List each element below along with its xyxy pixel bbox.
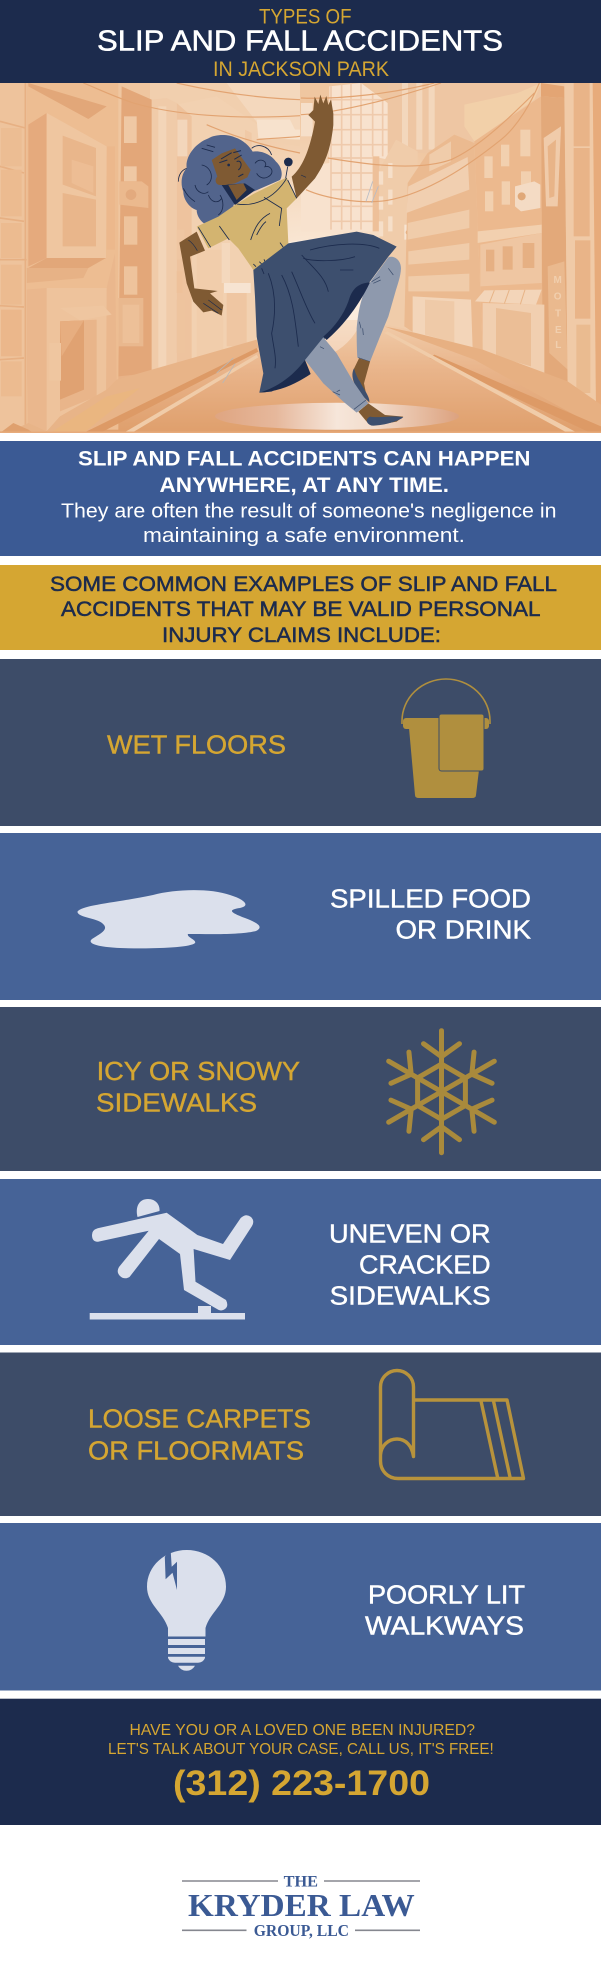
balcony building	[404, 135, 483, 350]
heading line: location: IN JACKSON PARK	[213, 58, 389, 81]
arm detail lines	[188, 175, 306, 313]
icon: falling person	[90, 1199, 253, 1320]
motel sign: T	[555, 308, 561, 319]
label: poorly lit line 1: POORLY LIT	[368, 1581, 525, 1609]
skirt shadow lower	[259, 360, 311, 393]
far left column of windows	[0, 290, 26, 432]
intro heading: SLIP AND FALL ACCIDENTS CAN HAPPEN	[78, 448, 530, 471]
glass tower	[301, 83, 388, 231]
motion lines, right	[366, 181, 378, 203]
hair curl lines	[178, 145, 272, 215]
panel: loose carpets or floormats	[0, 1352, 601, 1516]
panel: icy or snowy sidewalks	[0, 1007, 601, 1171]
skirt	[253, 232, 397, 393]
front leg details	[320, 347, 366, 409]
right side buildings	[301, 83, 601, 433]
motel sign	[548, 261, 568, 370]
face	[212, 148, 251, 185]
intro panel	[0, 441, 601, 556]
label: uneven line 3: SIDEWALKS	[330, 1280, 491, 1310]
tower with windows	[118, 86, 152, 376]
column	[168, 272, 176, 353]
call to action panel	[0, 1699, 601, 1825]
woman slipping	[178, 95, 403, 426]
hood toggle	[284, 158, 293, 166]
back shoe	[352, 368, 369, 402]
logo word: group, llc: GROUP, LLC	[254, 1921, 349, 1940]
label: loose carpets line 2: OR FLOORMATS	[88, 1435, 304, 1465]
subheading line 3: INJURY CLAIMS INCLUDE:	[162, 624, 441, 647]
skirt shadow upper	[323, 282, 370, 340]
raised arm and hand	[292, 95, 333, 198]
shirt lines and hood cord	[198, 167, 297, 267]
intro heading line 2: ANYWHERE, AT ANY TIME.	[160, 474, 449, 497]
overhead wires, left	[83, 83, 300, 153]
intro body line 1: They are often the result of someone's negligence in	[61, 499, 556, 522]
icon: broken light bulb	[147, 1550, 226, 1671]
label: spilled food line 1: SPILLED FOOD	[330, 884, 531, 914]
logo word: the: THE	[284, 1874, 318, 1891]
motion lines, left	[217, 358, 235, 383]
motel sign: O	[554, 292, 562, 303]
back leg detail lines	[358, 268, 393, 362]
cta line 2: LET'S TALK ABOUT YOUR CASE, CALL US, IT'S FREE!	[108, 1741, 494, 1758]
icon: rolled carpet	[380, 1370, 524, 1478]
label: icy line 2: SIDEWALKS	[96, 1088, 257, 1118]
panel: spilled food or drink	[0, 833, 601, 1000]
gold subheading panel	[0, 565, 601, 650]
hero bottom edge	[0, 432, 601, 433]
motel sign: M	[554, 275, 562, 286]
raised back leg	[357, 257, 401, 362]
motel sign: E	[555, 325, 562, 336]
logo: the kryder law group	[182, 1874, 420, 1940]
hair	[182, 135, 282, 226]
label: wet floors: WET FLOORS	[107, 729, 286, 759]
subheading line 1: SOME COMMON EXAMPLES OF SLIP AND FALL	[50, 573, 557, 596]
label: spilled food line 2: OR DRINK	[396, 915, 532, 945]
apartment building	[474, 96, 542, 338]
main building	[27, 83, 118, 430]
phone number: (312) 223-1700	[173, 1764, 430, 1803]
intro body line 2: maintaining a safe environment.	[143, 524, 465, 547]
cta line 1: HAVE YOU OR A LOVED ONE BEEN INJURED?	[130, 1722, 475, 1739]
overhead wires, right	[301, 83, 539, 202]
subheading line 2: ACCIDENTS THAT MAY BE VALID PERSONAL	[61, 598, 540, 621]
label: poorly lit line 2: WALKWAYS	[365, 1612, 524, 1640]
front leg	[305, 337, 368, 413]
hanging sign	[544, 126, 561, 206]
spotlight on pavement	[215, 403, 459, 430]
motel sign: L	[555, 340, 561, 351]
panel: uneven or cracked sidewalks	[0, 1179, 601, 1345]
panel: poorly lit walkways	[0, 1523, 601, 1690]
far right column	[564, 83, 596, 403]
back block	[379, 143, 408, 320]
header panel	[0, 0, 601, 83]
hero illustration: woman slipping on a city street	[0, 83, 601, 433]
label: icy line 1: ICY OR SNOWY	[97, 1056, 300, 1086]
label: loose carpets line 1: LOOSE CARPETS	[88, 1403, 311, 1433]
street background	[0, 83, 601, 433]
main title: SLIP AND FALL ACCIDENTS	[97, 26, 503, 58]
label: uneven line 1: UNEVEN OR	[329, 1218, 491, 1248]
lower arm and hand	[179, 232, 223, 316]
icon: puddle	[77, 890, 260, 948]
right sidewalk and kerb	[384, 326, 601, 430]
left side buildings	[0, 83, 300, 433]
skirt fold lines	[262, 244, 379, 368]
facial features	[219, 151, 243, 177]
front foot	[358, 403, 403, 426]
slanted rooftop	[464, 83, 541, 141]
left sidewalk and kerb	[0, 340, 258, 433]
logo word: kryder law: KRYDER LAW	[188, 1887, 415, 1923]
front shoe	[367, 415, 403, 426]
neck and collar	[222, 183, 255, 205]
heading line: types of: TYPES OF	[259, 5, 352, 28]
back ankle	[353, 358, 370, 392]
panel: wet floors	[0, 659, 601, 826]
label: uneven line 2: CRACKED	[359, 1249, 491, 1279]
shirt	[197, 177, 297, 270]
icon: bucket with towel	[402, 679, 490, 798]
icon: snowflake	[380, 1031, 503, 1153]
